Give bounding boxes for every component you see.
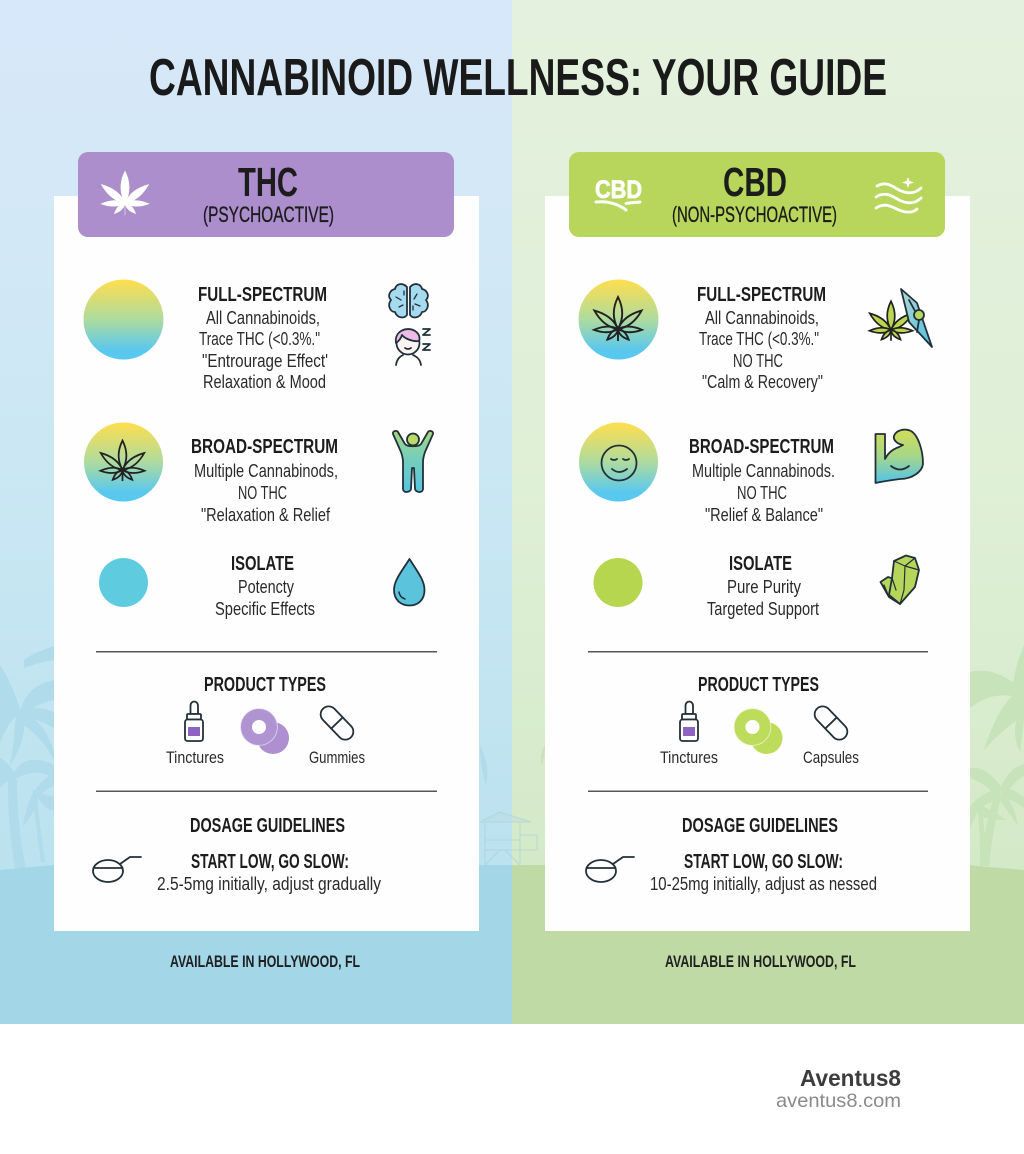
dosage heading: DOSAGE GUIDELINES (682, 815, 838, 837)
icon: white cannabis leaf (99, 171, 151, 215)
label: capsules: Capsules (803, 748, 859, 767)
full-spectrum text: FULL-SPECTRUM (697, 284, 826, 306)
icon: capsule (317, 703, 357, 743)
icon: outlined leaf (592, 297, 644, 341)
icon: water drop (394, 559, 424, 606)
dosage text: START LOW, GO SLOW: (191, 851, 349, 873)
ground: right (512, 865, 1024, 1024)
brand: Aventus8: Aventus8 (800, 1065, 901, 1091)
THC heading: THC (238, 159, 298, 205)
icon: outlined leaf (99, 441, 146, 481)
isolate text: ISOLATE (729, 553, 792, 575)
product types heading: PRODUCT TYPES (698, 674, 819, 696)
full-spectrum text: "Entrourage Effect' (202, 351, 328, 371)
icon: CBD badge: CBD (595, 176, 642, 204)
brand: Aventus8 (776, 1065, 901, 1112)
product types heading: PRODUCT TYPES (204, 674, 326, 696)
icon: white waves (876, 177, 921, 212)
card: THC (54, 196, 479, 931)
palm trees: left silhouettes (0, 646, 487, 868)
broad-spectrum text: "Relief & Balance" (705, 505, 823, 525)
broad-spectrum text: BROAD-SPECTRUM (191, 436, 338, 458)
broad-spectrum text: "Relaxation & Relief (201, 505, 331, 525)
icon: tincture bottle (185, 702, 203, 741)
dosage text: 2.5-5mg initially, adjust gradually (157, 874, 381, 894)
icon: calm face (602, 446, 636, 480)
brand url: aventus8.com (776, 1090, 901, 1112)
broad-spectrum text: BROAD-SPECTRUM (689, 436, 834, 458)
icon: crystals (880, 556, 919, 604)
label: gummies: Gummies (309, 748, 365, 767)
header: THC (78, 152, 454, 237)
full-spectrum gradient circle (84, 280, 164, 360)
isolate text: Potencty (238, 577, 294, 597)
dosage text: 10-25mg initially, adjust as nessed (650, 874, 877, 894)
broad-spectrum text: NO THC (238, 483, 287, 503)
full-spectrum text: Relaxation & Mood (203, 372, 326, 392)
dosage text (650, 851, 877, 894)
lifeguard tower silhouette (480, 812, 537, 865)
broad-spectrum text (191, 436, 338, 525)
dosage heading: DOSAGE GUIDELINES (190, 815, 345, 837)
dosage text (157, 851, 381, 894)
full-spectrum text (697, 284, 826, 392)
icon: sleeping person (396, 329, 430, 365)
broad-spectrum gradient circle with smile (579, 422, 658, 502)
full-spectrum text: "Calm & Recovery" (702, 372, 823, 392)
icon: gummies (240, 708, 289, 754)
icon: leaf and crystal shard (868, 289, 932, 347)
icon: flexed arm (876, 430, 923, 483)
icon: tincture bottle (680, 702, 698, 741)
panel: THC column (54, 152, 479, 931)
full-spectrum text: FULL-SPECTRUM (198, 284, 327, 306)
label: tinctures: Tinctures (660, 748, 718, 767)
card: CBD (545, 196, 970, 931)
isolate text: Specific Effects (215, 599, 315, 619)
isolate circle (99, 558, 148, 607)
isolate circle (594, 558, 642, 607)
icon: brain (389, 284, 428, 317)
THC subheading: (PSYCHOACTIVE) (203, 202, 334, 227)
location note: right: AVAILABLE IN HOLLYWOOD, FL (665, 952, 856, 971)
location note: left: AVAILABLE IN HOLLYWOOD, FL (170, 952, 360, 971)
full-spectrum gradient circle with leaf (578, 280, 658, 360)
isolate text (215, 553, 315, 619)
icon: person with raised arms (393, 431, 433, 492)
header: CBD (569, 152, 945, 237)
full-spectrum text: All Cannabinoids, (206, 308, 320, 328)
icon: spoon (586, 857, 634, 882)
label: tinctures: Tinctures (166, 748, 224, 767)
full-spectrum text (198, 284, 328, 392)
background: left blue half (0, 0, 512, 1024)
broad-spectrum text: NO THC (737, 483, 787, 503)
broad-spectrum gradient circle (84, 422, 163, 502)
isolate text (707, 553, 819, 619)
full-spectrum text: All Cannabinoids, (705, 308, 819, 328)
broad-spectrum text (689, 436, 835, 525)
panel: CBD column (545, 152, 970, 931)
CBD heading: CBD (723, 159, 787, 205)
CBD subheading: (NON-PSYCHOACTIVE) (672, 202, 837, 227)
isolate text: Targeted Support (707, 599, 819, 619)
background: right green half (512, 0, 1024, 1024)
icon: gummies (734, 708, 782, 754)
icon: capsule (811, 703, 851, 743)
full-spectrum text: Trace THC (<0.3%." (699, 329, 819, 349)
dosage text: START LOW, GO SLOW: (684, 851, 843, 873)
broad-spectrum text: Multiple Cannabinods. (692, 461, 835, 481)
isolate text: Pure Purity (727, 577, 801, 597)
ground: left (0, 865, 512, 1024)
palm trees: right silhouettes (541, 645, 1024, 866)
icon: spoon (93, 857, 141, 882)
isolate text: ISOLATE (231, 553, 294, 575)
broad-spectrum text: Multiple Cannabinods, (194, 461, 338, 481)
full-spectrum text: Trace THC (<0.3%." (199, 329, 320, 349)
full-spectrum text: NO THC (733, 351, 783, 371)
